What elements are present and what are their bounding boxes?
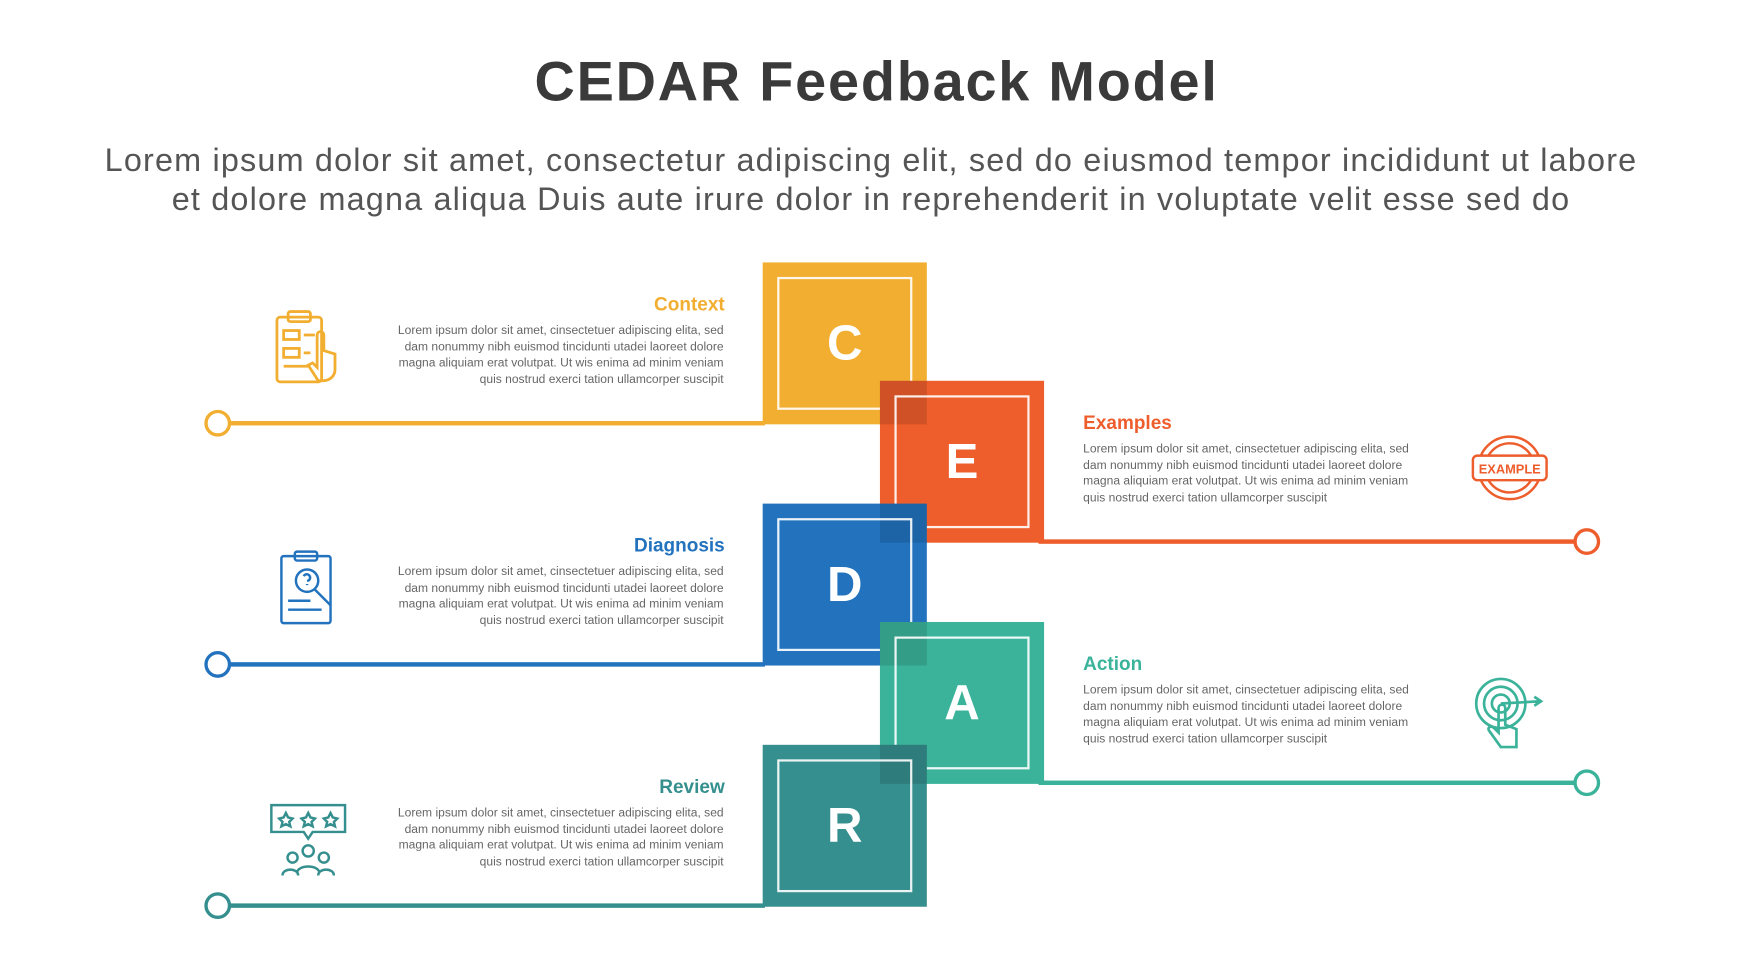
text: review [398,806,724,868]
subtitle: Lorem ipsum dolor sit amet, consectetur adipiscing elit, sed do eiusmod tempor incididunt ut labore [105,143,1637,179]
box R: R [827,798,863,853]
icon: clipboard hand [276,310,336,384]
icon: review stars [270,804,346,876]
text: context [398,324,724,386]
text: review: quis nostrud exerci tation ullamcorper suscipit [480,855,724,868]
line: context [218,421,765,425]
text: diagnosis: dam nonummy nibh euismod tincidunti utadei laoreet dolore [405,581,724,595]
line: action [1039,781,1586,785]
subtitle [105,143,1637,218]
box C [763,262,927,424]
dot: action [1573,769,1600,796]
text: action: magna aliquiam erat volutpat. Ut wis enima ad minim veniam [1083,716,1408,729]
text: context: Lorem ipsum dolor sit amet, cinsectetuer adipiscing elita, sed [398,324,724,337]
icon: clipboard magnifier [280,550,332,624]
text: diagnosis: quis nostrud exerci tation ullamcorper suscipit [480,614,724,627]
text: review: Lorem ipsum dolor sit amet, cinsectetuer adipiscing elita, sed [398,806,724,820]
heading: diagnosis: Diagnosis [634,535,725,556]
text: examples: Lorem ipsum dolor sit amet, cinsectetuer adipiscing elita, sed [1083,442,1409,456]
line: diagnosis [218,662,765,667]
heading: examples: Examples [1083,412,1172,433]
text: review: dam nonummy nibh euismod tincidunti utadei laoreet dolore [405,822,724,836]
subtitle: et dolore magna aliqua Duis aute irure dolor in reprehenderit in voluptate velit esse sed do [172,182,1570,218]
line: review [218,903,765,908]
box A: A [944,675,980,730]
title: CEDAR Feedback Model [535,50,1219,113]
text: action: quis nostrud exerci tation ullamcorper suscipit [1083,732,1327,745]
dot: review [204,892,231,919]
line: examples [1039,539,1586,544]
text: examples: quis nostrud exerci tation ullamcorper suscipit [1083,491,1327,504]
text: context: dam nonummy nibh euismod tincidunti utadei laoreet dolore [405,340,724,353]
text: context: quis nostrud exerci tation ullamcorper suscipit [480,372,724,386]
text: context: magna aliquiam erat volutpat. Ut wis enima ad minim veniam [399,356,724,370]
text: action: Lorem ipsum dolor sit amet, cinsectetuer adipiscing elita, sed [1083,683,1409,697]
text: examples: dam nonummy nibh euismod tincidunti utadei laoreet dolore [1083,458,1402,472]
dot: context [204,410,231,437]
icon: target hand [1474,678,1544,748]
icon: example stamp: EXAMPLE [1479,461,1541,476]
box A [880,622,1044,784]
box D: D [827,557,863,611]
box E: E [946,434,978,489]
text: diagnosis: Lorem ipsum dolor sit amet, cinsectetuer adipiscing elita, sed [398,565,724,578]
box R [763,745,927,907]
text: action: dam nonummy nibh euismod tincidunti utadei laoreet dolore [1083,700,1402,713]
icon: example stamp [1472,435,1548,500]
dot: diagnosis [204,651,231,678]
text: action [1083,683,1409,745]
text: diagnosis [398,565,724,627]
text: review: magna aliquiam erat volutpat. Ut wis enima ad minim veniam [399,839,724,852]
box E [880,381,1044,543]
heading: context: Context [654,294,725,315]
dot: examples [1573,528,1600,555]
heading: action: Action [1083,653,1142,674]
box C: C [827,315,863,370]
box D [763,504,927,666]
text: examples [1083,442,1409,504]
text: examples: magna aliquiam erat volutpat. Ut wis enima ad minim veniam [1083,475,1408,488]
heading: review: Review [659,776,725,797]
text: diagnosis: magna aliquiam erat volutpat. Ut wis enima ad minim veniam [399,597,724,611]
